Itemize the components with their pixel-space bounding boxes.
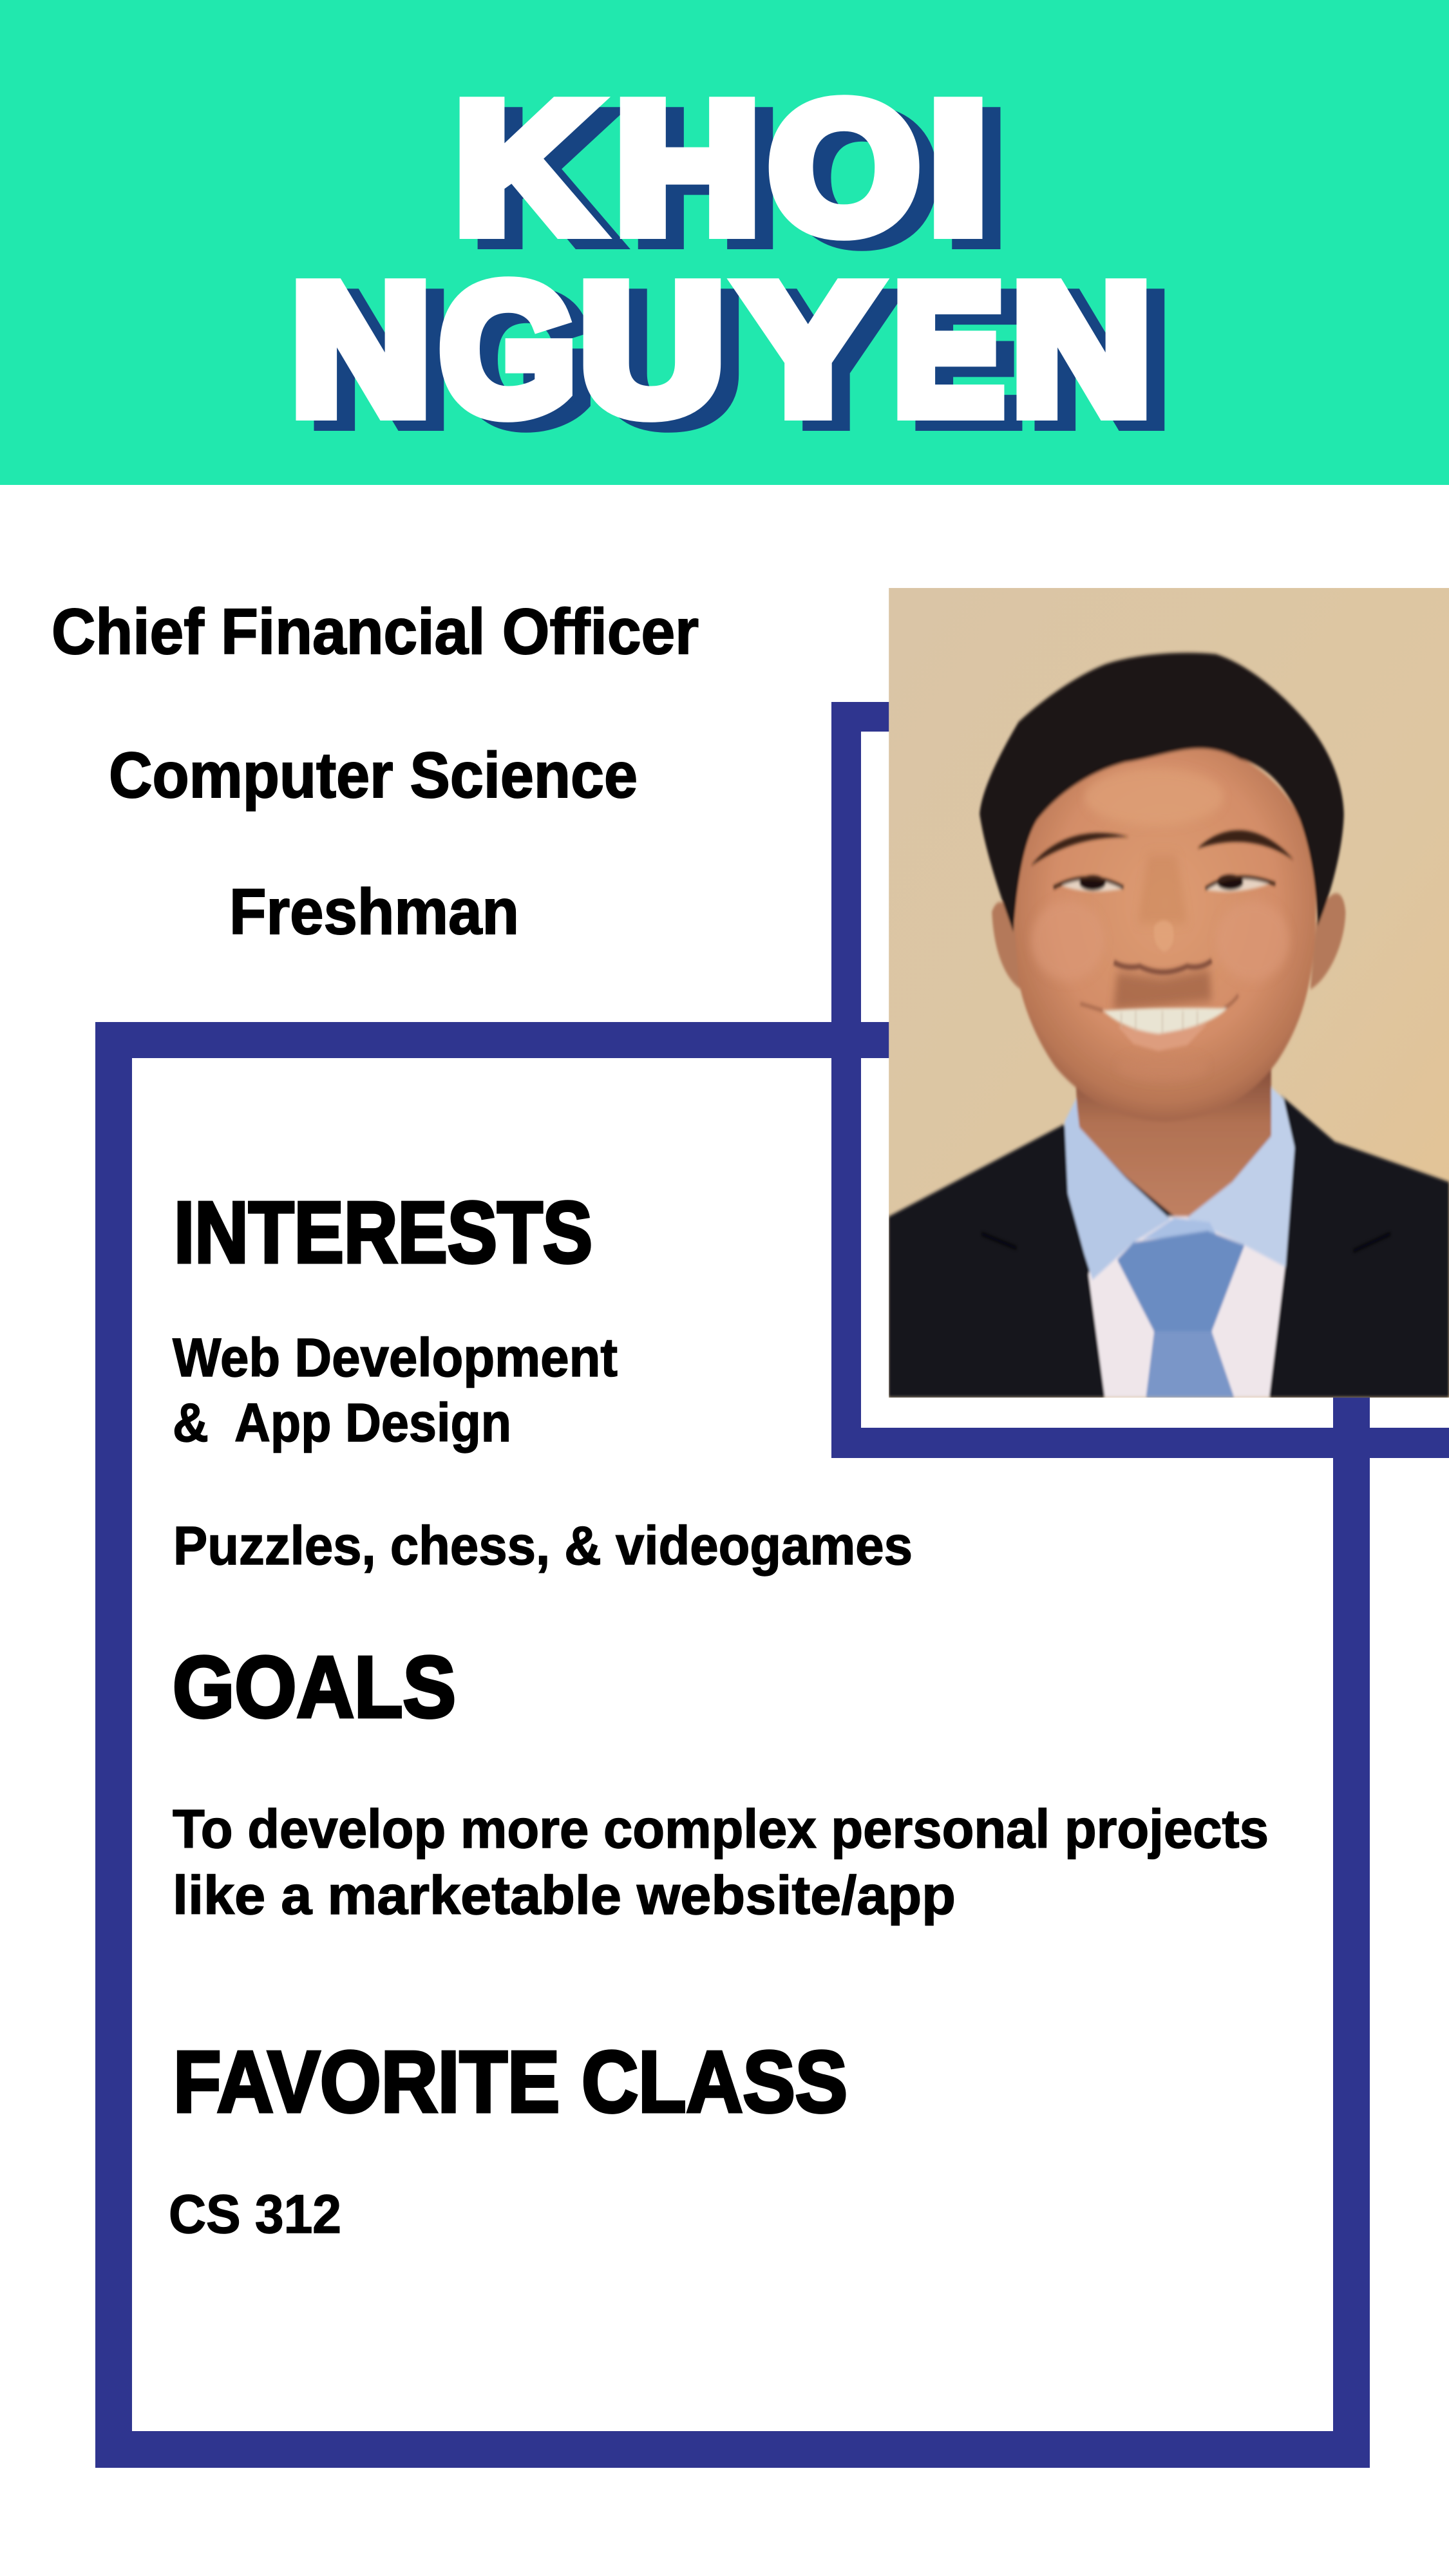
favorite class heading: FAVORITE CLASS [173,2033,848,2130]
role text block: Freshman [229,876,519,948]
title white lettering: G [440,247,576,453]
title: Khoi Nguyen [291,64,1170,463]
title shadow: I [947,75,1006,281]
photo backing frame [831,702,1449,1458]
goals heading: GOALS [173,1638,456,1736]
brows [1031,830,1294,866]
title white lettering: N [291,247,431,452]
smile lines [1080,995,1238,1010]
large content frame [95,1022,1370,2468]
suit jacket [889,1095,1449,1397]
title white lettering [291,64,1151,453]
title white lettering: E [893,246,1004,452]
interests list [173,1327,913,1576]
title shadow: N [309,258,449,462]
neck [1075,1061,1271,1217]
role text block: Chief Financial Officer [52,596,699,668]
title shadow: N [1030,258,1170,462]
right collar [1187,1087,1294,1267]
goals text: like a marketable website/app [173,1865,956,1926]
title white lettering: I [929,65,988,270]
goals text [173,1799,1269,1926]
nose shadow [1113,969,1211,1010]
title white lettering: Y [739,246,878,452]
title shadow: U [598,257,743,462]
role text block: Computer Science [109,739,638,811]
title white lettering: O [769,66,920,270]
ears [992,902,1021,989]
lapel notches [981,1234,1390,1251]
eyes [1062,879,1269,892]
title white lettering: N [1012,247,1151,452]
title white lettering: U [580,247,724,452]
lower shirt [1088,1217,1285,1397]
interests list: Web Development [173,1327,618,1388]
tie blade [1146,1332,1235,1397]
title shadow: E [911,256,1022,462]
collar gap [1142,1218,1216,1240]
goals text: To develop more complex personal projects [173,1799,1269,1859]
role text block [52,596,699,948]
title shadow: O [787,76,938,281]
forehead and cheek shading [1032,770,1289,1010]
hair [980,653,1344,932]
lower lip [1117,1024,1208,1051]
left collar [1065,1099,1171,1280]
interests list: Puzzles, chess, & videogames [173,1515,913,1576]
title shadow: K [473,75,615,281]
title shadow [309,75,1170,463]
tie knot [1117,1231,1244,1332]
face [1014,745,1316,1122]
nose [1154,920,1173,952]
favorite class text: CS 312 [169,2184,341,2244]
interests heading: INTERESTS [174,1184,592,1281]
photo: portrait of Khoi Nguyen [889,588,1449,1397]
teeth [1103,1008,1227,1034]
title shadow: Y [757,256,896,462]
title white lettering: K [455,64,597,270]
title white lettering: H [615,65,760,270]
title shadow: H [633,75,778,281]
chin shadow [1117,1054,1208,1079]
interests list: & App Design [173,1392,511,1453]
header band [0,0,1449,485]
title shadow: G [458,257,594,463]
nose bridge [1138,854,1187,923]
